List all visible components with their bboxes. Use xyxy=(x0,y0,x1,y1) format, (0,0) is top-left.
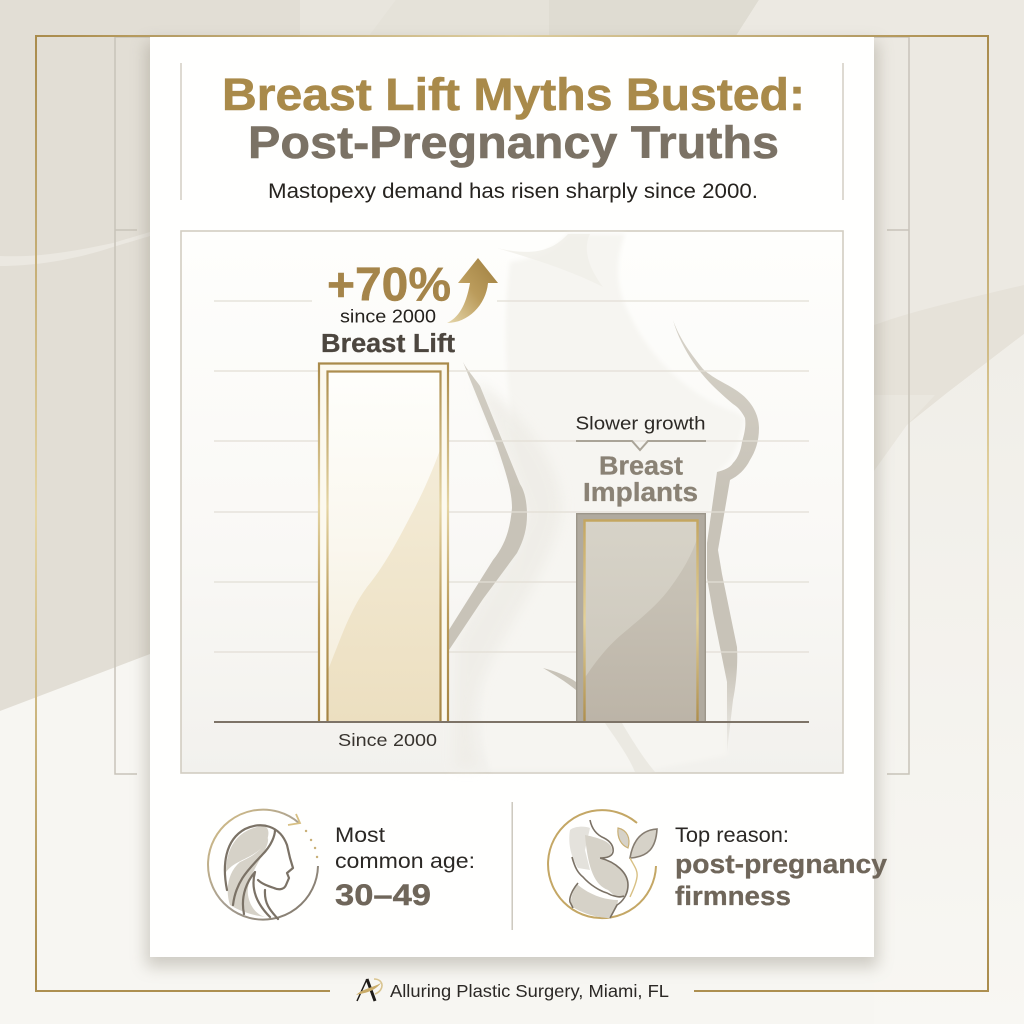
hip contour xyxy=(543,668,576,690)
divider xyxy=(512,802,513,930)
stat: age xyxy=(208,810,475,920)
bar: breast lift xyxy=(319,364,448,722)
bar outer frame xyxy=(319,364,448,722)
bar fill xyxy=(320,364,447,722)
hip outline xyxy=(570,883,578,908)
hair top fill xyxy=(226,826,268,872)
title line two: Post-Pregnancy Truths xyxy=(248,117,779,168)
reason value line one: post-pregnancy xyxy=(675,849,887,879)
arm outline xyxy=(572,857,624,897)
bar inner field xyxy=(584,520,698,722)
logo swoosh xyxy=(356,983,381,995)
panel background xyxy=(181,231,843,773)
icon: woman profile xyxy=(208,810,318,920)
bar outer edge xyxy=(577,514,705,722)
reason text: Top reason: xyxy=(675,824,789,847)
gridlines xyxy=(214,301,809,652)
breast lift label: Breast Lift xyxy=(321,330,456,358)
lower leg shading xyxy=(605,723,655,772)
large leaf xyxy=(630,829,657,858)
bar inner gold frame xyxy=(584,520,698,722)
footer credit: Alluring Plastic Surgery, Miami, FL xyxy=(390,981,669,1001)
bar inner field xyxy=(328,372,440,722)
callout: +70% xyxy=(321,258,498,358)
white card xyxy=(150,37,874,957)
ring dots xyxy=(306,831,317,857)
ring xyxy=(208,810,318,920)
age value: 30–49 xyxy=(335,879,431,912)
torso fill xyxy=(585,835,628,898)
ring arrow xyxy=(288,814,300,825)
pointer rule xyxy=(576,441,706,450)
age text line two: common age: xyxy=(335,850,475,873)
bar: breast implants xyxy=(576,513,706,722)
icon: pregnant silhouette with leaf xyxy=(548,810,657,918)
age text: Most xyxy=(335,824,385,847)
arm shade xyxy=(569,827,590,870)
implants label line one: Breast xyxy=(599,452,684,480)
hair strand two xyxy=(243,872,270,917)
slower growth text: Slower growth xyxy=(576,414,706,434)
since 2000: since 2000 xyxy=(340,306,436,326)
header xyxy=(181,63,843,203)
callout: slower growth xyxy=(576,414,706,507)
bar wave xyxy=(328,450,440,722)
percentage: +70% xyxy=(327,258,451,310)
reason value line two: firmness xyxy=(675,881,791,911)
body tone xyxy=(482,234,745,770)
paper crease xyxy=(0,232,150,266)
chart panel xyxy=(181,231,843,773)
baseline xyxy=(214,721,809,723)
subtitle: Mastopexy demand has risen sharply since 2000. xyxy=(268,180,758,203)
face and hair outline xyxy=(225,825,293,890)
small leaf xyxy=(618,828,629,848)
neck line xyxy=(265,890,278,919)
logo A left leg xyxy=(357,979,367,1001)
logo A right leg xyxy=(367,979,375,1001)
logo xyxy=(356,979,382,1001)
faint inner frame xyxy=(115,37,909,774)
shoulder shade xyxy=(497,234,603,287)
hair lower fill xyxy=(228,838,268,917)
chest contour xyxy=(673,320,759,752)
silhouette backdrop xyxy=(447,234,759,772)
header side rules xyxy=(181,63,843,200)
stat: reason xyxy=(548,810,887,918)
bar wave xyxy=(584,536,698,722)
belly outline xyxy=(590,820,628,918)
footer xyxy=(356,979,669,1001)
hips fill xyxy=(571,883,618,918)
card shadow xyxy=(146,42,878,967)
torso shading xyxy=(455,380,562,768)
ring xyxy=(548,810,656,918)
bar inner frame xyxy=(328,372,440,722)
title line one: Breast Lift Myths Busted: xyxy=(222,69,805,120)
back contour xyxy=(447,362,527,653)
growth arrow xyxy=(447,258,498,323)
hair strand xyxy=(233,830,275,905)
implants label line two: Implants xyxy=(583,479,698,507)
logo P bowl xyxy=(374,979,382,994)
bar fill xyxy=(576,513,706,722)
stem xyxy=(630,858,637,897)
x-axis label: Since 2000 xyxy=(338,730,437,750)
